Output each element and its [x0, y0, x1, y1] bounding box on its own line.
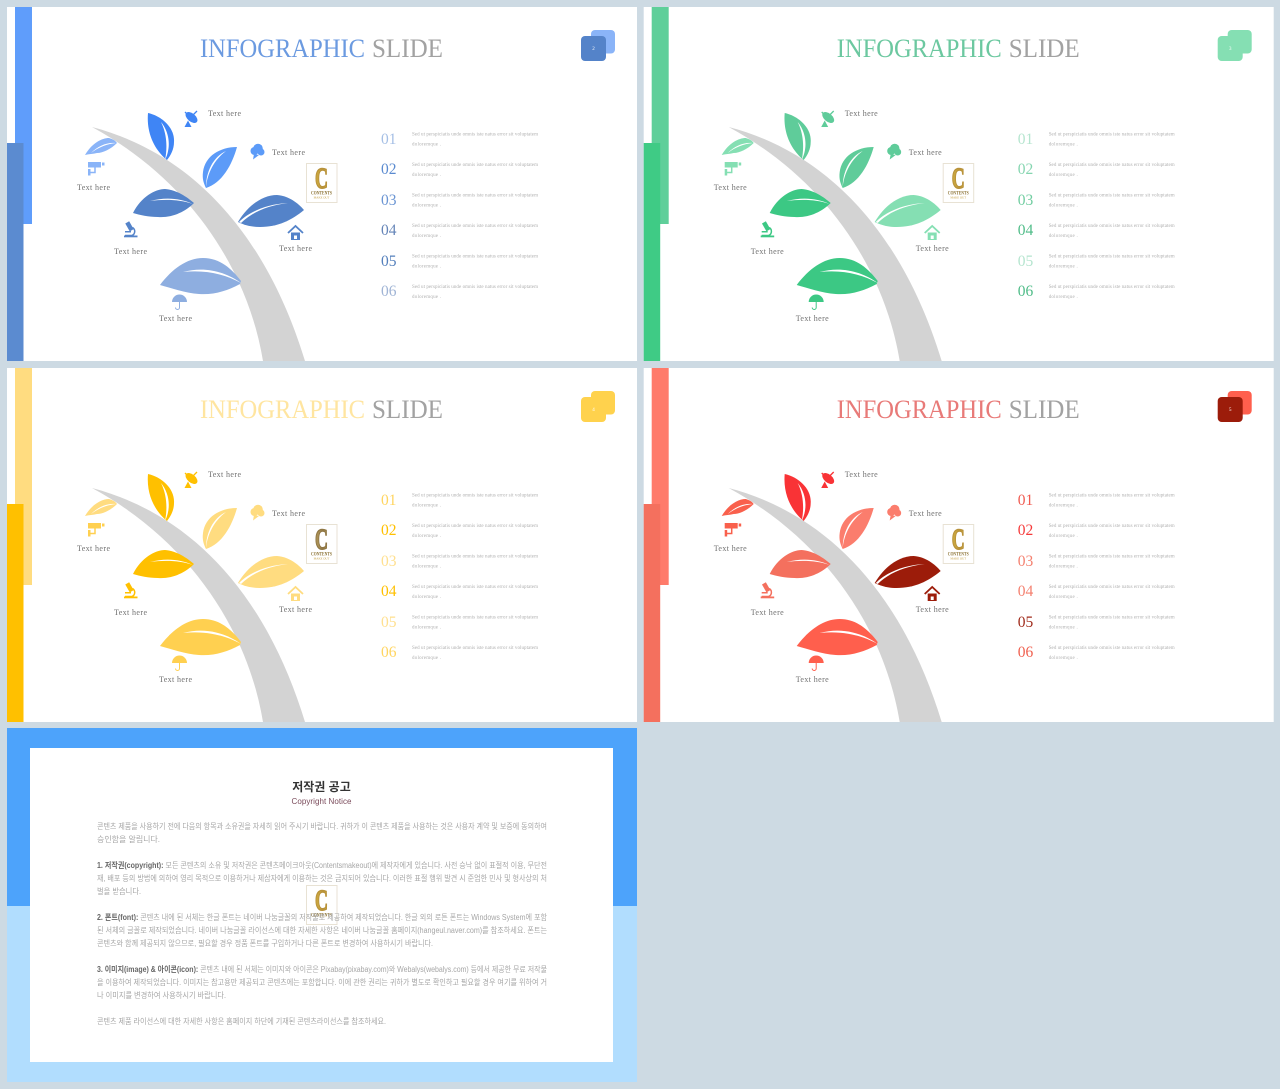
title accent: INFOGRAPHIC: [200, 395, 365, 424]
descriptions: doloremque .: [1049, 564, 1078, 570]
numbers: 03: [381, 553, 397, 570]
leaf 5: [797, 258, 878, 294]
icon: cloud: [887, 144, 901, 160]
slide background: [7, 7, 637, 361]
descriptions: Sed ut perspiciatis unde omnis iste natus error sit voluptatem: [412, 616, 538, 620]
descriptions: doloremque .: [1049, 534, 1078, 539]
leaf 2: [839, 508, 874, 549]
labels: Text here: [272, 148, 305, 157]
numbers: 06: [381, 644, 397, 661]
descriptions: doloremque .: [412, 264, 441, 270]
logo: CONTENTS: [311, 914, 332, 918]
tree trunk: [92, 488, 305, 722]
numbers: 06: [1018, 283, 1033, 300]
descriptions: doloremque .: [412, 204, 441, 208]
title accent: INFOGRAPHIC: [837, 34, 1002, 63]
icon: camera: [725, 523, 741, 536]
logo: CONTENTS: [948, 552, 969, 558]
labels: Text here: [845, 470, 878, 479]
descriptions: Sed ut perspiciatis unde omnis iste natus error sit voluptatem: [1049, 494, 1175, 498]
descriptions: Sed ut perspiciatis unde omnis iste natus error sit voluptatem: [1049, 163, 1175, 168]
icon: satellite: [820, 471, 836, 488]
numbers: 02: [381, 161, 396, 178]
left dark bar: [7, 504, 24, 722]
descriptions: doloremque .: [1049, 504, 1078, 508]
logo: [306, 162, 337, 202]
descriptions: Sed ut perspiciatis unde omnis iste natus error sit voluptatem: [412, 554, 538, 560]
page badge: 3: [1229, 47, 1232, 52]
numbers: 05: [1018, 253, 1033, 270]
upper blue background: [7, 728, 637, 906]
descriptions: doloremque .: [1049, 204, 1078, 208]
leaf 1: [148, 113, 174, 160]
labels: Text here: [909, 148, 942, 157]
numbers: 04: [1018, 583, 1033, 600]
leaf 5: [160, 258, 241, 294]
icon: house: [288, 587, 303, 601]
descriptions: doloremque .: [412, 534, 441, 539]
left light bar: [15, 368, 32, 585]
descriptions: Sed ut perspiciatis unde omnis iste natus error sit voluptatem: [412, 254, 538, 260]
left light bar: [652, 7, 669, 224]
slide background: [644, 7, 1274, 361]
descriptions: Sed ut perspiciatis unde omnis iste natus error sit voluptatem: [412, 224, 538, 229]
numbers: 05: [381, 253, 397, 270]
page badge: [1218, 30, 1252, 61]
title grey: SLIDE: [372, 395, 443, 424]
labels: [77, 470, 312, 684]
labels: Text here: [845, 109, 878, 118]
descriptions: doloremque .: [1049, 234, 1078, 239]
icon: microscope: [124, 221, 138, 237]
leaf 5: [797, 619, 878, 655]
labels: Text here: [208, 109, 241, 118]
title grey: SLIDE: [1009, 34, 1080, 63]
numbers: 01: [1018, 131, 1033, 148]
leaf 2: [839, 147, 874, 188]
icon: cloud: [250, 505, 264, 520]
labels: Text here: [159, 675, 192, 684]
leaf 3: [133, 189, 194, 217]
icon: satellite: [820, 110, 836, 127]
numbers: 02: [381, 522, 396, 539]
descriptions: [412, 494, 538, 661]
left dark bar: [644, 143, 660, 361]
tree trunk: [729, 127, 942, 361]
descriptions: Sed ut perspiciatis unde omnis iste natus error sit voluptatem: [412, 494, 538, 498]
leaf 4: [875, 195, 941, 227]
notice body text: 콘텐츠 제품을 사용하기 전에 다음의 항목과 소유권을 자세히 읽어 주시기 바랍니다. 귀하가 이 콘텐츠 제품을 사용하는 것은 사용자 계약 및 보증에 동의하여: [97, 821, 547, 831]
icon: camera: [725, 162, 741, 176]
notice body text: 을 이용하여 제작되었습니다. 이미지는 참고용만 제공되고 콘텐츠에는 포함합니다. 이에 관한 권리는 귀하가 별도로 확인하고 필요할 경우 여기를 위하여 거: [97, 977, 547, 987]
descriptions: Sed ut perspiciatis unde omnis iste natus error sit voluptatem: [1049, 224, 1175, 229]
logo: C: [315, 162, 328, 195]
descriptions: Sed ut perspiciatis unde omnis iste natus error sit voluptatem: [1049, 554, 1175, 560]
slide 4: yellow tree infographic: [7, 368, 637, 722]
labels: Text here: [272, 509, 305, 518]
icon: camera: [88, 523, 104, 536]
descriptions: Sed ut perspiciatis unde omnis iste natus error sit voluptatem: [1049, 585, 1175, 590]
icon: cloud: [250, 144, 264, 160]
leaf 6: [85, 499, 117, 516]
descriptions: Sed ut perspiciatis unde omnis iste natus error sit voluptatem: [1049, 616, 1175, 620]
descriptions: doloremque .: [1049, 595, 1078, 600]
slide 3: green tree infographic: [644, 7, 1274, 361]
numbers: 01: [1018, 492, 1033, 509]
icon: umbrella: [172, 656, 187, 670]
logo: C: [952, 523, 965, 556]
numbers: 03: [381, 192, 397, 209]
notice body text: 승인함을 알립니다.: [97, 834, 160, 844]
labels: Text here: [796, 314, 829, 323]
icon: house: [925, 226, 940, 240]
numbers: 02: [1018, 161, 1033, 178]
leaf 4: [238, 195, 304, 227]
descriptions: Sed ut perspiciatis unde omnis iste natus error sit voluptatem: [412, 285, 538, 290]
left light bar: [15, 7, 32, 224]
descriptions: Sed ut perspiciatis unde omnis iste natus error sit voluptatem: [412, 646, 538, 651]
numbers: 03: [1018, 553, 1033, 570]
descriptions: Sed ut perspiciatis unde omnis iste natus error sit voluptatem: [412, 194, 538, 198]
logo: CONTENTS: [311, 552, 332, 558]
page badge: [581, 30, 615, 61]
left dark bar: [644, 504, 660, 722]
icon: house: [288, 226, 303, 240]
notice body text: 나 이미지를 변경하여 사용하시기 바랍니다.: [97, 990, 226, 1000]
notice body text: 된 서체의 글꼴로 제작되었습니다. 네이버 나눔글꼴 라이선스에 대한 자세한 사항은 네이버 나눔글꼴 홈페이지(hangeul.naver.com)를 참조하세요. 폰트는: [97, 925, 547, 935]
icon: umbrella: [809, 656, 824, 670]
labels: Text here: [751, 608, 784, 617]
page badge: 2: [592, 47, 595, 52]
icon: microscope: [761, 221, 774, 237]
descriptions: [412, 132, 538, 300]
numbers: 04: [1018, 222, 1033, 239]
descriptions: doloremque .: [1049, 295, 1078, 300]
descriptions: [1049, 494, 1175, 661]
descriptions: Sed ut perspiciatis unde omnis iste natus error sit voluptatem: [412, 585, 538, 590]
leaf 4: [238, 556, 304, 588]
numbers: 02: [1018, 522, 1033, 539]
page badge: [581, 391, 615, 422]
leaf 1: [784, 113, 811, 160]
labels: Text here: [114, 608, 147, 617]
icon: microscope: [761, 582, 774, 598]
leaf 3: [770, 550, 831, 578]
numbers: [1018, 131, 1033, 300]
descriptions: [1049, 132, 1175, 300]
leaf 1: [148, 474, 174, 521]
icon: camera: [88, 162, 104, 176]
page badge: [1218, 391, 1252, 422]
icon: house: [925, 587, 940, 601]
notice subheading: Copyright Notice: [292, 797, 352, 806]
descriptions: doloremque .: [412, 504, 441, 508]
numbers: 03: [1018, 192, 1033, 209]
labels: [714, 470, 949, 684]
title grey: SLIDE: [372, 34, 443, 63]
descriptions: doloremque .: [412, 142, 441, 148]
logo: CONTENTS: [948, 192, 969, 196]
labels: Text here: [208, 470, 241, 479]
descriptions: Sed ut perspiciatis unde omnis iste natus error sit voluptatem: [1049, 646, 1175, 651]
left light bar: [652, 368, 669, 585]
tree trunk: [729, 488, 942, 722]
icon: satellite: [184, 110, 199, 127]
logo: [306, 884, 337, 924]
icon: umbrella: [172, 295, 187, 310]
leaf 6: [722, 499, 754, 516]
panel: copyright notice slide: [7, 728, 637, 1082]
notice body text: 재, 배포 등의 방법에 의하여 영리 목적으로 이용하거나 제삼자에게 이용하는 것은 금지되어 있습니다. 이러한 표절 행위 발견 시 준엄한 민사 및 형사상의 처: [97, 873, 547, 883]
labels: Text here: [714, 544, 747, 553]
left dark bar: [7, 143, 24, 361]
numbers: 04: [381, 583, 397, 600]
slide 2: blue tree infographic: [7, 7, 637, 361]
descriptions: doloremque .: [412, 595, 441, 600]
descriptions: Sed ut perspiciatis unde omnis iste natus error sit voluptatem: [1049, 254, 1175, 260]
numbers: 04: [381, 222, 397, 239]
descriptions: Sed ut perspiciatis unde omnis iste natus error sit voluptatem: [1049, 132, 1175, 138]
descriptions: doloremque .: [412, 626, 441, 630]
notice body text: [97, 821, 548, 1026]
labels: Text here: [909, 509, 942, 518]
descriptions: doloremque .: [1049, 142, 1078, 148]
notice body text: 2. 폰트(font): 콘텐츠 내에 된 서체는 한글 폰트는 네이버 나눔글꼴의 저작물로 제공하여 제작되었습니다. 한글 외의 로튼 폰트는 Windows System에 포함: [97, 912, 548, 922]
logo: C: [315, 884, 328, 917]
leaf 6: [85, 138, 117, 155]
leaf 5: [160, 619, 241, 655]
labels: Text here: [77, 183, 110, 192]
leaf 6: [722, 138, 754, 155]
descriptions: Sed ut perspiciatis unde omnis iste natus error sit voluptatem: [1049, 524, 1175, 529]
numbers: [1018, 492, 1033, 661]
white sheet: [30, 748, 613, 1062]
logo: MAKE OUT: [950, 556, 966, 560]
descriptions: doloremque .: [1049, 173, 1078, 178]
notice body text: 콘텐츠 제품 라이선스에 대한 자세한 사항은 홈페이지 하단에 기재된 콘텐츠라이선스를 참조하세요.: [97, 1016, 386, 1026]
logo: MAKE OUT: [314, 556, 330, 560]
descriptions: Sed ut perspiciatis unde omnis iste natus error sit voluptatem: [1049, 194, 1175, 198]
leaf 2: [203, 508, 237, 549]
labels: Text here: [114, 247, 147, 256]
logo: C: [315, 523, 328, 556]
icon: satellite: [184, 471, 199, 488]
icon: microscope: [124, 582, 138, 598]
numbers: 01: [381, 131, 396, 148]
notice body text: 1. 저작권(copyright): 모든 콘텐츠의 소유 및 저작권은 콘텐츠메이크아웃(Contentsmakeout)에 제작자에게 있습니다. 사전 승낙 없이 표절적 이용, 무단전: [97, 860, 547, 870]
notice heading: 저작권 공고: [292, 779, 351, 794]
descriptions: doloremque .: [1049, 656, 1078, 661]
logo: MAKE OUT: [314, 196, 330, 200]
descriptions: Sed ut perspiciatis unde omnis iste natus error sit voluptatem: [412, 132, 538, 138]
labels: Text here: [796, 675, 829, 684]
descriptions: Sed ut perspiciatis unde omnis iste natus error sit voluptatem: [412, 524, 538, 529]
page badge: 4: [592, 408, 595, 413]
numbers: 06: [381, 283, 397, 300]
descriptions: doloremque .: [412, 564, 441, 570]
title accent: INFOGRAPHIC: [837, 395, 1002, 424]
leaf 2: [203, 147, 237, 188]
leaf 3: [133, 550, 194, 578]
labels: Text here: [916, 244, 949, 253]
descriptions: Sed ut perspiciatis unde omnis iste natus error sit voluptatem: [412, 163, 538, 168]
tree trunk: [92, 127, 305, 361]
page badge: 5: [1229, 408, 1232, 413]
descriptions: doloremque .: [1049, 626, 1078, 630]
labels: Text here: [279, 605, 312, 614]
labels: Text here: [916, 605, 949, 614]
logo: CONTENTS: [311, 192, 332, 196]
logo: [306, 523, 337, 564]
numbers: 05: [381, 614, 397, 631]
notice body text: 3. 이미지(image) & 아이콘(icon): 콘텐츠 내에 된 서체는 이미지와 아이콘은 Pixabay(pixabay.com)와 Webalys(webalys.com) 등에서 제공한 무료 저작물: [97, 964, 547, 974]
leaf 3: [770, 189, 831, 217]
numbers: [381, 492, 397, 661]
numbers: [381, 131, 397, 300]
descriptions: doloremque .: [412, 234, 441, 239]
logo: C: [952, 162, 965, 195]
numbers: 05: [1018, 614, 1033, 631]
descriptions: doloremque .: [412, 295, 441, 300]
labels: Text here: [751, 247, 784, 256]
leaf 1: [784, 474, 811, 521]
descriptions: doloremque .: [412, 173, 441, 178]
numbers: 06: [1018, 644, 1033, 661]
logo: MAKE OUT: [950, 196, 966, 200]
labels: Text here: [77, 544, 110, 553]
lower pale blue background: [7, 906, 637, 1082]
labels: [714, 109, 949, 323]
labels: Text here: [159, 314, 192, 323]
leaf 4: [875, 556, 941, 588]
labels: [77, 109, 312, 323]
slide background: [644, 368, 1274, 722]
notice body text: 콘텐츠와 함께 제공되지 않으므로, 필요할 경우 정품 폰트를 구입하거나 다른 폰트로 변경하여 사용하시기 바랍니다.: [97, 938, 433, 948]
title accent: INFOGRAPHIC: [200, 34, 365, 63]
labels: Text here: [714, 183, 747, 192]
logo: [943, 162, 974, 202]
notice body text: 벌을 받습니다.: [97, 886, 141, 896]
icon: umbrella: [809, 295, 824, 310]
labels: Text here: [279, 244, 312, 253]
descriptions: doloremque .: [1049, 264, 1078, 270]
slide 5: red tree infographic: [644, 368, 1274, 722]
descriptions: Sed ut perspiciatis unde omnis iste natus error sit voluptatem: [1049, 285, 1175, 290]
icon: cloud: [887, 505, 901, 520]
title grey: SLIDE: [1009, 395, 1080, 424]
slide background: [7, 368, 637, 722]
logo: [943, 523, 974, 564]
numbers: 01: [381, 492, 396, 509]
descriptions: doloremque .: [412, 656, 441, 661]
